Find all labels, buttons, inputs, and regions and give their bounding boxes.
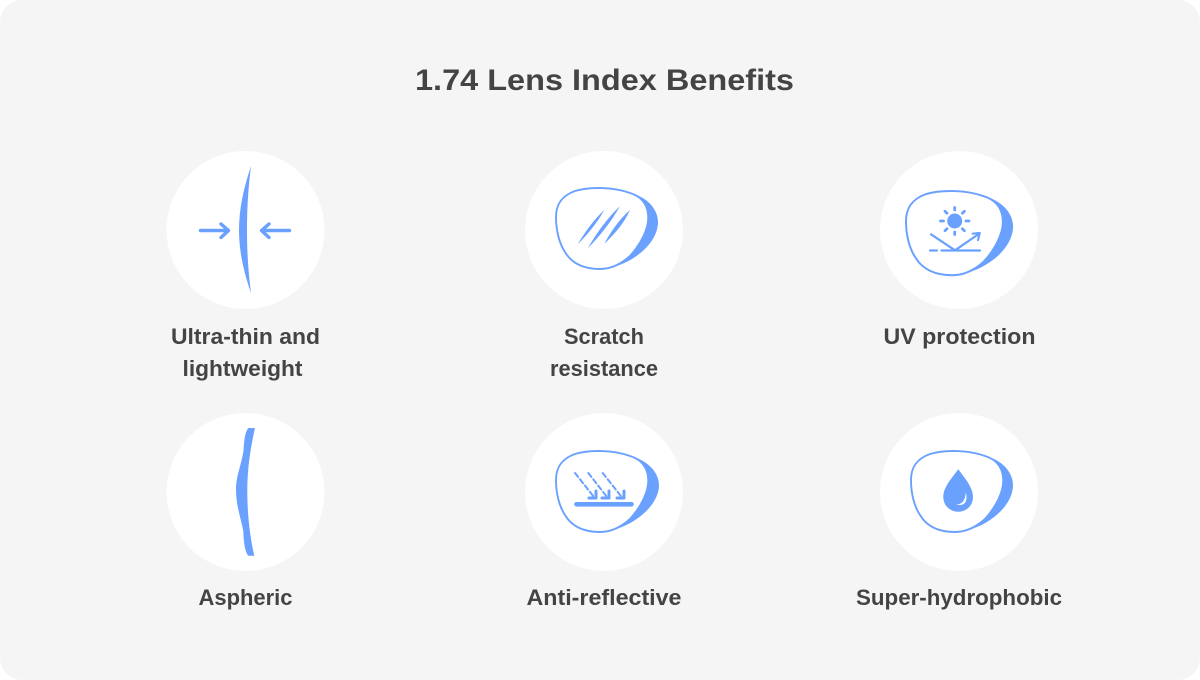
label: UV protection: UV protection <box>884 324 1036 349</box>
icon circle: anti-reflective <box>525 413 683 571</box>
icon: aspheric lens profile <box>236 428 255 556</box>
label: aspheric: Aspheric <box>198 585 292 610</box>
icon circle: hydrophobic <box>880 413 1038 571</box>
card: scratch resistance <box>525 151 683 381</box>
label: ultra-thin and lightweight: Ultra-thin and <box>171 324 320 349</box>
card: ultra-thin and lightweight <box>166 151 324 381</box>
icon: thin lens with arrows <box>200 166 290 293</box>
card: aspheric <box>166 413 324 610</box>
label: ultra-thin and lightweight <box>171 324 320 381</box>
icon circle: ultra-thin <box>166 151 324 309</box>
card: anti-reflective <box>525 413 683 610</box>
icon circle: scratch <box>525 151 683 309</box>
card: UV protection <box>880 151 1038 349</box>
label: ultra-thin and lightweight: lightweight <box>182 356 303 381</box>
icon circle: aspheric <box>166 413 324 571</box>
title: 1.74 Lens Index Benefits <box>415 64 794 97</box>
icon: scratched lens <box>556 188 658 269</box>
label: super-hydrophobic: Super-hydrophobic <box>856 585 1062 610</box>
label: scratch resistance: resistance <box>550 356 658 381</box>
icon: lens with sun <box>906 191 1013 275</box>
label: anti-reflective: Anti-reflective <box>526 585 682 610</box>
icon: lens with water drop <box>911 451 1013 532</box>
icon circle: UV <box>880 151 1038 309</box>
label: scratch resistance: Scratch <box>564 324 644 349</box>
label: scratch resistance <box>550 324 658 381</box>
icon: lens with dashed arrows <box>556 451 659 532</box>
card: super-hydrophobic <box>856 413 1062 610</box>
